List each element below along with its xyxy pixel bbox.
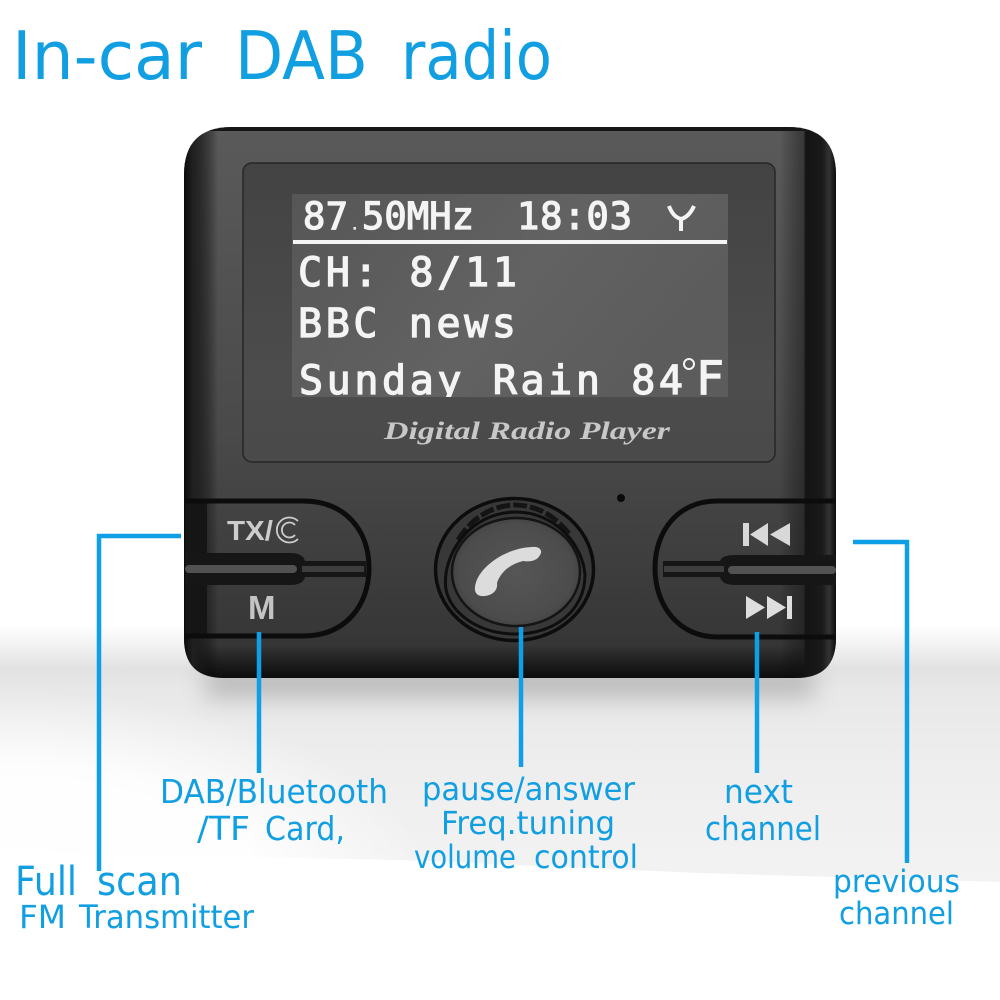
title: In-car [12, 17, 202, 95]
screen panel [243, 163, 775, 462]
label: knob: pause/answer [422, 770, 636, 808]
label: M button: DAB/Bluetooth [160, 772, 388, 811]
device: DAB radio [184, 127, 836, 678]
device body [184, 127, 836, 678]
icon: phone handset [475, 547, 541, 596]
label: TX button [15, 859, 255, 936]
icon: previous [743, 523, 790, 546]
label: previous channel: previous [833, 864, 960, 900]
label: M button: Card, [265, 809, 345, 848]
right button pair [655, 501, 836, 637]
display readout: 50MHz [362, 195, 474, 238]
label: knob: control [534, 838, 638, 876]
left button pair [184, 501, 369, 636]
label: knob: volume [414, 838, 516, 876]
label: M button [160, 772, 388, 848]
display readout: 18:03 [517, 195, 632, 238]
icon: next [746, 596, 792, 619]
label: knob [414, 770, 638, 876]
display readout: 87 [303, 195, 348, 238]
label: next channel: channel [705, 809, 821, 848]
label: TX button: scan [97, 859, 182, 905]
label: next channel [705, 772, 821, 848]
screen caption: Digital Radio Player [383, 418, 670, 445]
microphone hole [617, 494, 625, 502]
left button pair: TX/ [227, 515, 273, 546]
display readout: F [696, 351, 724, 405]
left button pair: M [248, 589, 276, 626]
display readout [292, 194, 728, 405]
title: DAB [235, 17, 368, 95]
background floor shade [0, 625, 1000, 890]
label: TX button: Full [15, 859, 77, 905]
icon: call symbol [277, 518, 298, 542]
label: knob: Freq.tuning [441, 804, 615, 842]
label: M button: /TF [197, 809, 250, 848]
callout lines [99, 536, 907, 871]
display readout: . [352, 222, 357, 232]
display readout: CH: 8/11 [298, 250, 517, 296]
display readout: BBC news [298, 301, 516, 347]
label: TX button: Transmitter [78, 898, 255, 936]
title [12, 17, 552, 95]
label: TX button: FM [19, 898, 66, 936]
display readout: Sunday Rain 84 [299, 358, 683, 404]
label: next channel: next [724, 772, 793, 811]
label: previous channel: channel [839, 896, 954, 932]
icon: antenna [669, 206, 694, 231]
title: radio [401, 17, 552, 95]
knob with phone icon [436, 498, 594, 640]
label: previous channel [833, 864, 960, 932]
